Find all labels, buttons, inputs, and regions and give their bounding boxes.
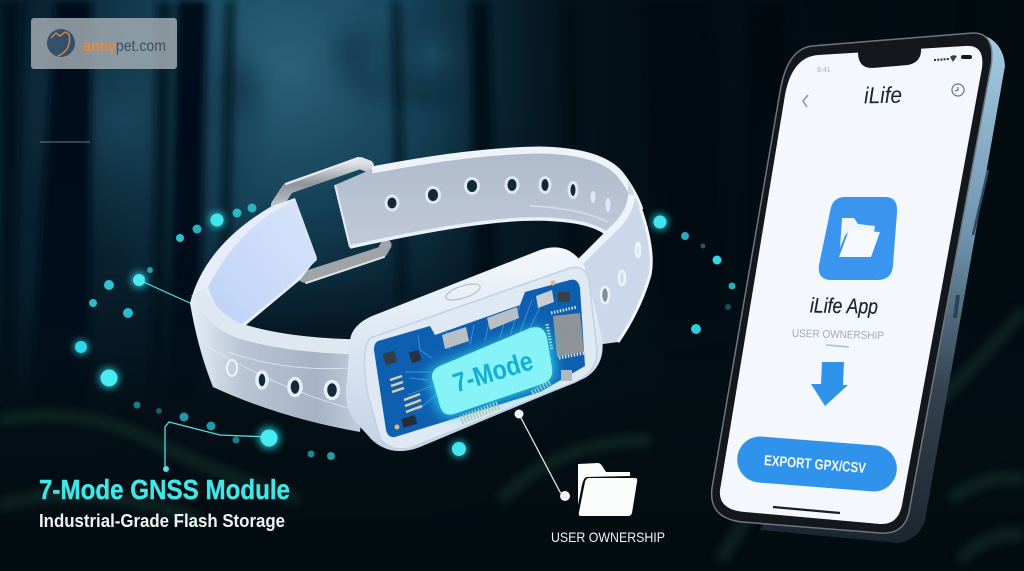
front strap [190,292,370,432]
callout: GNSS module title: 7-Mode GNSS Module [39,474,290,505]
logo badge: annypet.com [83,38,166,55]
export button: EXPORT GPX/CSV [763,453,867,477]
faint line top left [40,141,90,143]
callout: user ownership: USER OWNERSHIP [551,530,665,545]
glowing 7-Mode chip [430,327,554,415]
sublabel underline [826,345,849,347]
glowing 7-Mode chip: 7-Mode [449,346,537,398]
app icon: blue folder [819,197,897,280]
phone bezel [712,33,992,533]
home indicator [773,507,840,513]
sublabel: USER OWNERSHIP [792,328,884,342]
icon: white folder [578,463,637,516]
phone screen [720,46,982,524]
circuit board [374,280,585,437]
GPS collar band [190,147,651,451]
thin connector to strap [139,280,190,303]
callout: user ownership [514,410,665,545]
app name: iLife App [810,294,878,319]
right front strap [578,180,651,345]
down arrow [811,362,848,406]
clock icon [952,84,964,96]
callout: GNSS module title [39,422,290,531]
module housing [346,247,603,451]
left strap [190,198,317,340]
glowing satellite dots [74,204,736,460]
status bar: 9:41 [817,67,831,74]
back chevron [803,95,808,107]
status bar [817,55,972,74]
screen title: iLife [864,82,902,108]
notch [858,48,921,68]
export button [735,435,899,493]
metal buckle [277,158,386,283]
phone side edge [760,33,1005,543]
back strap with holes [335,147,640,248]
logo badge [31,18,177,69]
callout: GNSS module title: Industrial-Grade Flash Storage [39,511,285,531]
smartphone [712,33,1005,543]
